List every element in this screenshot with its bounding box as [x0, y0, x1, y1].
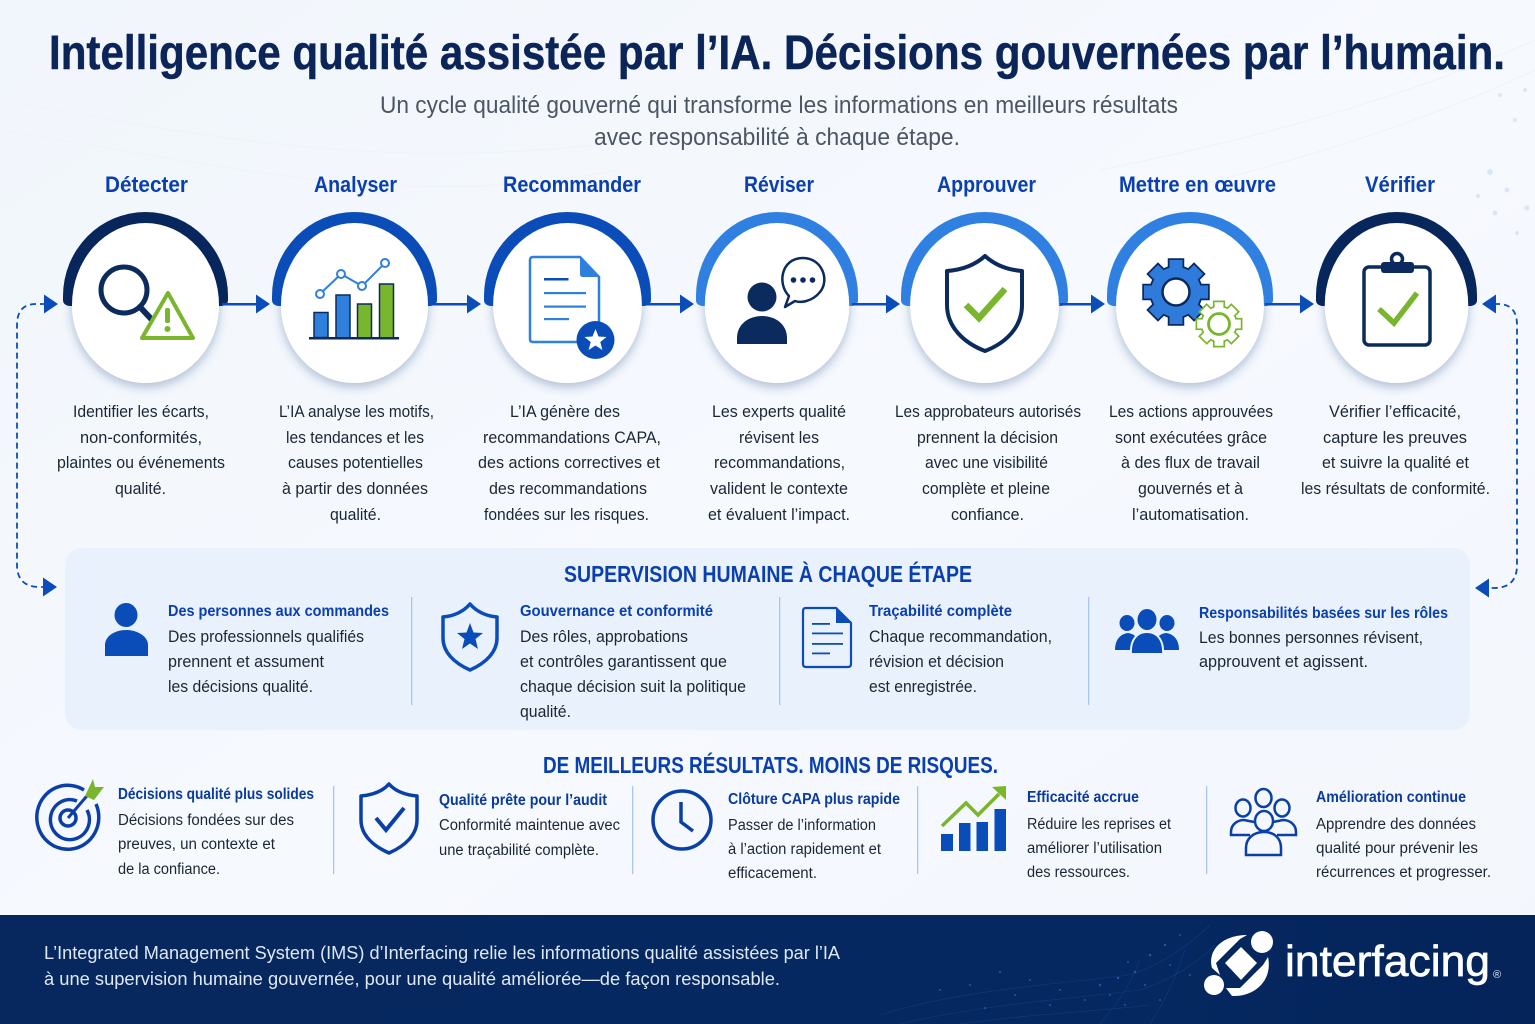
item: efficacité — [1027, 789, 1172, 881]
item: clôture CAPA: efficacement. — [728, 865, 817, 882]
item: gouvernance: qualité. — [520, 703, 571, 721]
item: gouvernance: Gouvernance et conformité — [520, 603, 713, 620]
item: efficacité: Réduire les reprises et — [1027, 816, 1172, 833]
description: valident le contexte — [710, 480, 848, 498]
description: et évaluent l’impact. — [708, 506, 850, 524]
section heading: SUPERVISION HUMAINE À CHAQUE ÉTAPE — [564, 560, 972, 587]
circle badge — [272, 212, 437, 383]
description — [708, 403, 850, 524]
icon: clock — [653, 791, 711, 849]
subtitle: avec responsabilité à chaque étape. — [594, 124, 960, 151]
description: confiance. — [951, 506, 1024, 524]
arrow: 6 to 7 — [1265, 294, 1314, 314]
panel: résultats — [37, 751, 1491, 882]
description: L’IA génère des — [510, 403, 620, 421]
description: capture les preuves — [1323, 429, 1467, 447]
description: sont exécutées grâce — [1115, 429, 1267, 447]
item: décisions: Décisions fondées sur des — [118, 812, 294, 829]
description: Les experts qualité — [712, 403, 846, 421]
description: l’automatisation. — [1132, 506, 1249, 524]
description: L’IA analyse les motifs, — [279, 403, 434, 421]
step 6: Mettre en œuvre — [1107, 172, 1276, 524]
icon: shield with check — [947, 256, 1022, 351]
step 2: Analyser — [272, 172, 437, 524]
description: prennent la décision — [917, 429, 1058, 447]
description: non-conformités, — [80, 429, 202, 447]
description: des recommandations — [489, 480, 647, 498]
description: qualité. — [330, 506, 381, 524]
icon: people circle — [1231, 789, 1296, 855]
item: gouvernance: chaque décision suit la politique — [520, 678, 746, 696]
item: audit: Conformité maintenue avec — [439, 817, 620, 834]
item: audit: une traçabilité complète. — [439, 842, 599, 859]
icon: group of people — [1115, 609, 1179, 654]
item: clôture CAPA: Passer de l’information — [728, 817, 876, 834]
step 5: Approuver — [895, 172, 1081, 524]
item: clôture CAPA — [728, 791, 900, 882]
item: clôture CAPA: Clôture CAPA plus rapide — [728, 791, 900, 808]
description: révisent les — [739, 429, 819, 447]
circle badge — [901, 212, 1068, 383]
arrow: 3 to 4 — [645, 294, 694, 314]
description: gouvernés et à — [1138, 480, 1244, 498]
item: clôture CAPA: à l’action rapidement et — [728, 841, 882, 858]
icon: shield with check — [361, 784, 417, 853]
description — [279, 403, 434, 524]
icon: person with speech bubble — [737, 258, 824, 344]
icon: document — [803, 607, 852, 667]
step 7: Vérifier — [1301, 172, 1490, 498]
item: décisions: preuves, un contexte et — [118, 836, 276, 853]
item: responsabilités: Responsabilités basées sur les rôles — [1199, 605, 1448, 622]
circle badge — [696, 212, 858, 383]
item: personnes aux commandes: Des personnes aux commandes — [168, 603, 389, 620]
item: efficacité: améliorer l’utilisation — [1027, 840, 1162, 857]
item: efficacité: Efficacité accrue — [1027, 789, 1139, 806]
item: traçabilité: est enregistrée. — [869, 678, 977, 696]
description: plaintes ou événements — [57, 454, 225, 472]
icon: gears — [1144, 260, 1241, 346]
item: amélioration: qualité pour prévenir les — [1316, 840, 1478, 857]
icon: document with star — [530, 257, 614, 359]
item: décisions — [118, 786, 314, 878]
item: efficacité: des ressources. — [1027, 864, 1130, 881]
footer band — [0, 915, 1535, 1024]
circle badge — [484, 212, 651, 383]
item: amélioration: Amélioration continue — [1316, 789, 1466, 806]
description: Les actions approuvées — [1109, 403, 1273, 421]
description — [895, 403, 1081, 524]
description — [1301, 403, 1490, 498]
arrow: 5 to 6 — [1060, 294, 1105, 314]
description: et suivre la qualité et — [1322, 454, 1469, 472]
description: avec une visibilité — [925, 454, 1048, 472]
icon: target — [37, 779, 104, 849]
description: les tendances et les — [286, 429, 424, 447]
description: recommandations CAPA, — [483, 429, 661, 447]
icon: shield with star — [443, 604, 497, 670]
logo: interfacing: interfacing — [1285, 937, 1490, 986]
item: gouvernance — [520, 603, 746, 721]
description: Identifier les écarts, — [73, 403, 209, 421]
item: responsabilités: approuvent et agissent. — [1199, 653, 1368, 671]
arrow: 4 to 5 — [852, 294, 900, 314]
description: complète et pleine — [922, 480, 1050, 498]
heading: Vérifier — [1365, 172, 1435, 197]
description: Vérifier l’efficacité, — [1329, 403, 1461, 421]
subtitle: Un cycle qualité gouverné qui transforme les informations en meilleurs résultats — [380, 92, 1178, 119]
footer text: à une supervision humaine gouvernée, pour une qualité améliorée—de façon responsable. — [44, 969, 780, 989]
icon: person — [105, 603, 148, 656]
description: fondées sur les risques. — [484, 506, 649, 524]
item: traçabilité: Chaque recommandation, — [869, 628, 1052, 646]
item: amélioration: Apprendre des données — [1316, 816, 1476, 833]
item: gouvernance: et contrôles garantissent que — [520, 653, 727, 671]
item: responsabilités: Les bonnes personnes révisent, — [1199, 629, 1423, 647]
description: les résultats de conformité. — [1301, 480, 1490, 498]
item: traçabilité: révision et décision — [869, 653, 1004, 671]
arrow: right dashed feedback loop — [1475, 294, 1517, 598]
item: personnes aux commandes: les décisions qualité. — [168, 678, 313, 696]
icon: growth chart — [941, 786, 1006, 851]
footer text — [44, 943, 840, 989]
icon: magnifier and warning — [101, 267, 193, 338]
heading: Recommander — [503, 172, 641, 197]
heading: Analyser — [314, 172, 397, 197]
description: à partir des données — [282, 480, 428, 498]
arrow: left dashed feedback loop — [17, 294, 58, 596]
description: des actions correctives et — [478, 454, 660, 472]
description: Les approbateurs autorisés — [895, 403, 1081, 421]
logo: interfacing — [1204, 931, 1501, 996]
item: gouvernance: Des rôles, approbations — [520, 628, 688, 646]
description — [1109, 403, 1273, 524]
arrow: 2 to 3 — [432, 294, 481, 314]
item: amélioration — [1316, 789, 1491, 881]
step 1: Détecter — [57, 172, 228, 498]
item: audit — [439, 792, 620, 859]
step 3: Recommander — [478, 172, 661, 524]
description: à des flux de travail — [1121, 454, 1260, 472]
panel: supervision humaine — [65, 548, 1470, 730]
item: personnes aux commandes: Des professionnels qualifiés — [168, 628, 364, 646]
heading: Détecter — [105, 172, 188, 197]
item: traçabilité: Traçabilité complète — [869, 603, 1012, 620]
item: amélioration: récurrences et progresser. — [1316, 864, 1491, 881]
section heading: DE MEILLEURS RÉSULTATS. MOINS DE RISQUES. — [543, 751, 998, 778]
circle badge — [1107, 212, 1273, 383]
heading: Mettre en œuvre — [1119, 172, 1276, 197]
heading: Approuver — [937, 172, 1036, 197]
subtitle — [380, 92, 1178, 151]
description: recommandations, — [714, 454, 845, 472]
step 4: Réviser — [696, 172, 858, 524]
arrow: 1 to 2 — [222, 294, 270, 314]
item: traçabilité — [869, 603, 1052, 696]
item: décisions: Décisions qualité plus solides — [118, 786, 314, 803]
circle badge — [1316, 212, 1477, 383]
item: personnes aux commandes — [168, 603, 389, 696]
logo: interfacing: ® — [1493, 969, 1501, 981]
heading: Réviser — [744, 172, 814, 197]
item: décisions: de la confiance. — [118, 861, 220, 878]
item: responsabilités — [1199, 605, 1448, 671]
icon: bar chart — [309, 259, 399, 340]
icon: clipboard with check — [1364, 254, 1430, 345]
description — [57, 403, 225, 498]
item: audit: Qualité prête pour l’audit — [439, 792, 607, 809]
item: personnes aux commandes: prennent et assument — [168, 653, 324, 671]
footer text: L’Integrated Management System (IMS) d’Interfacing relie les informations qualité assistées par l’IA — [44, 943, 840, 963]
description — [478, 403, 661, 524]
circle badge — [63, 212, 228, 383]
description: causes potentielles — [288, 454, 423, 472]
description: qualité. — [115, 480, 166, 498]
